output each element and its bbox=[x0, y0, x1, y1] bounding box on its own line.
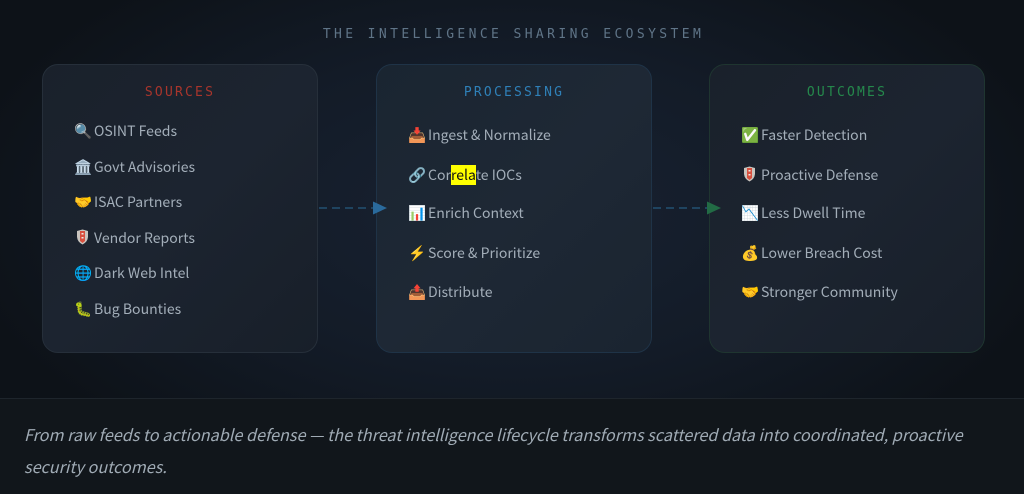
item: Less Dwell Time: Less Dwell Time bbox=[761, 203, 865, 223]
item: Ingest & Normalize: 📥 bbox=[408, 124, 426, 145]
item: Lower Breach Cost: 💰 bbox=[741, 242, 759, 263]
item: ISAC Partners: 🤝 bbox=[74, 191, 92, 212]
item: Score & Prioritize: Score & Prioritize bbox=[428, 243, 540, 263]
item: ISAC Partners: ISAC Partners bbox=[94, 192, 182, 212]
item: Correlate IOCs: Correlate IOCs bbox=[428, 165, 522, 185]
item: Stronger Community: Stronger Community bbox=[761, 282, 898, 302]
item: Bug Bounties: Bug Bounties bbox=[94, 299, 181, 319]
item: Faster Detection: Faster Detection bbox=[761, 125, 867, 145]
caption bbox=[0, 398, 1024, 494]
item: Faster Detection: ✅ bbox=[741, 124, 759, 145]
item: Less Dwell Time: 📉 bbox=[741, 202, 759, 223]
item: Score & Prioritize: ⚡ bbox=[408, 242, 426, 263]
item: Distribute: Distribute bbox=[428, 282, 492, 302]
arrow: processing to outcomes bbox=[653, 202, 721, 214]
panel: processing bbox=[376, 64, 652, 353]
item: Distribute: 📤 bbox=[408, 281, 426, 302]
panel: sources bbox=[42, 64, 318, 353]
title: THE INTELLIGENCE SHARING ECOSYSTEM bbox=[323, 27, 704, 42]
item: Proactive Defense: Proactive Defense bbox=[761, 165, 878, 185]
item: Lower Breach Cost: Lower Breach Cost bbox=[761, 243, 882, 263]
item: Correlate IOCs: 🔗 bbox=[408, 164, 426, 185]
item: Govt Advisories: 🏛️ bbox=[74, 156, 92, 177]
heading: sources: SOURCES bbox=[145, 85, 215, 100]
arrow: sources to processing bbox=[319, 202, 387, 214]
heading: outcomes: OUTCOMES bbox=[807, 85, 887, 100]
caption: From raw feeds to actionable defense — the threat intelligence lifecycle transforms scattered data into coordinated, proactive security outcomes. bbox=[24, 422, 963, 478]
item: Bug Bounties: 🐛 bbox=[74, 298, 92, 319]
item: OSINT Feeds: 🔍 bbox=[74, 120, 92, 141]
item: Ingest & Normalize: Ingest & Normalize bbox=[428, 125, 551, 145]
item: OSINT Feeds: OSINT Feeds bbox=[94, 121, 177, 141]
heading: processing: PROCESSING bbox=[464, 85, 564, 100]
panel: outcomes bbox=[709, 64, 985, 353]
item: Govt Advisories: Govt Advisories bbox=[94, 157, 195, 177]
item: Stronger Community: 🤝 bbox=[741, 281, 759, 302]
item: Vendor Reports: Vendor Reports bbox=[94, 228, 195, 248]
item: Enrich Context: 📊 bbox=[408, 202, 426, 223]
item: Dark Web Intel: 🌐 bbox=[74, 262, 92, 283]
item: Enrich Context: Enrich Context bbox=[428, 203, 524, 223]
item: Dark Web Intel: Dark Web Intel bbox=[94, 263, 189, 283]
